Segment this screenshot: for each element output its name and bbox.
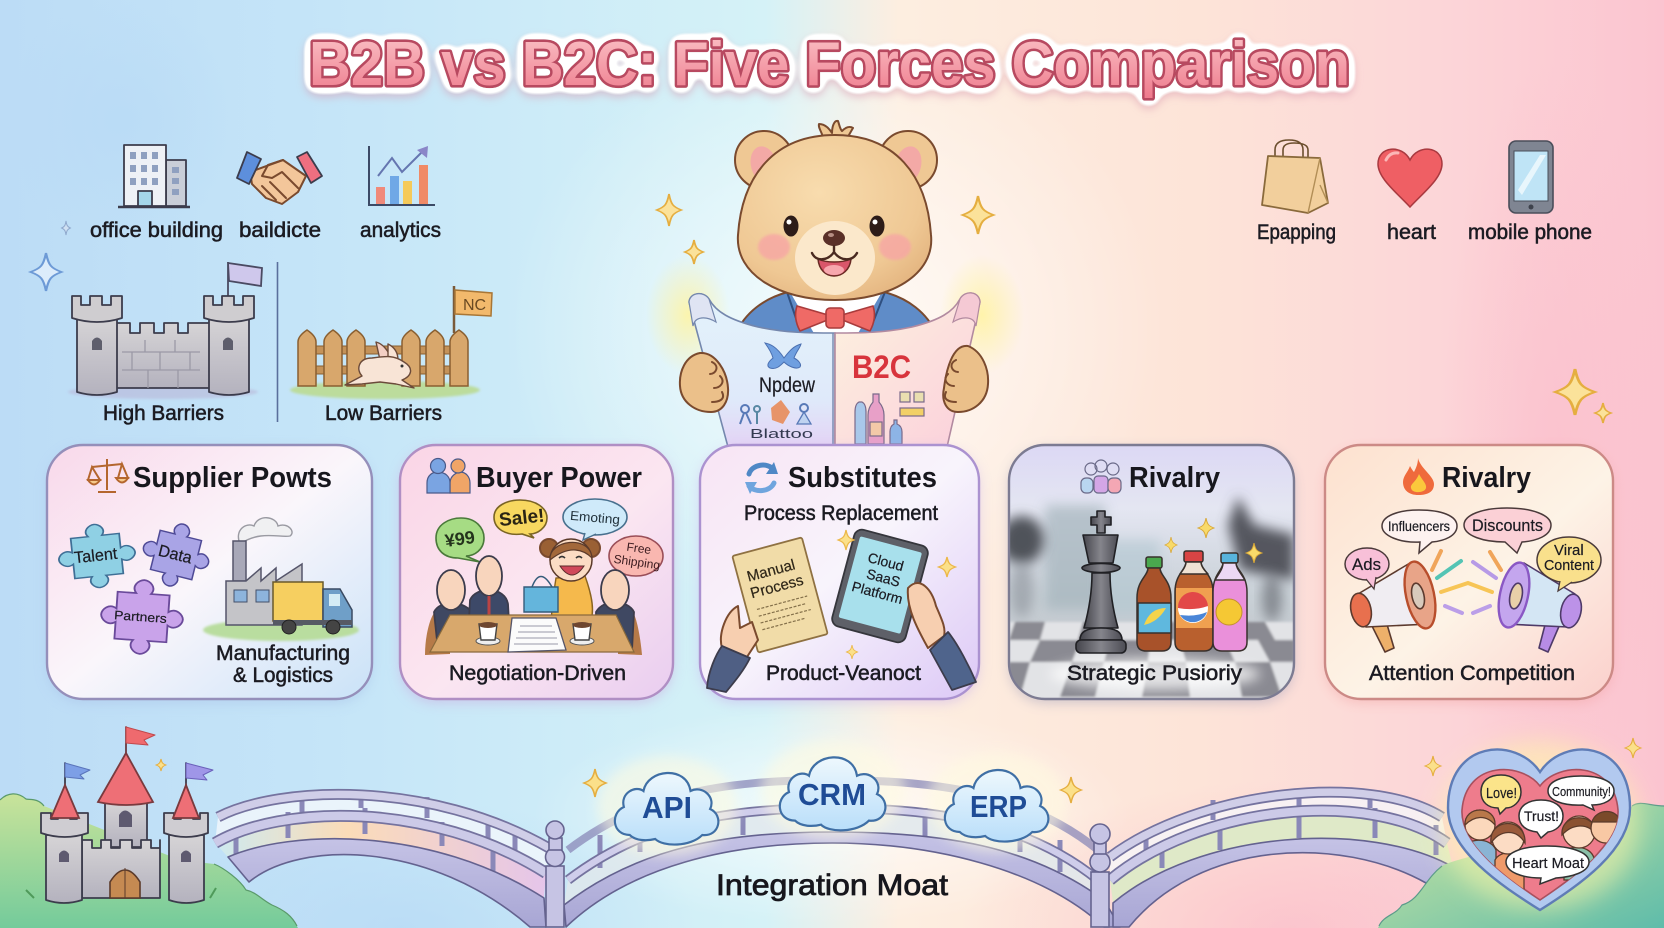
cloud: API: API [642,790,692,825]
puzzle: talent: Talent [73,545,119,567]
icon: mobile phone [1509,141,1553,213]
bear jacket and bow tie [735,292,937,335]
icon: scales [88,459,128,492]
left hand and sleeve [707,606,758,692]
heading: Buyer Power [476,462,642,494]
bubble: emoting [563,499,627,540]
icon: handshake [237,152,322,204]
caption: Manufacturing [216,641,350,665]
label: heart: heart [1387,220,1436,244]
bridge span: left [215,790,549,927]
bubble: ¥99 [436,518,484,562]
meeting table and people [425,556,642,655]
cloud: ERP: ERP [970,789,1027,824]
cloud: ERP [945,770,1048,842]
puzzle: partners: Partners [114,608,168,626]
bridge pillars [546,821,1110,927]
sparkles along the moat [156,738,1641,803]
streaks of attention [1432,551,1501,613]
newspaper small icons [740,400,811,424]
label: handshake: baildicte [239,218,321,242]
right hand and sleeve [908,583,976,690]
blurred city backdrop [1000,496,1294,622]
heart moat [1440,741,1640,910]
label: Integration Moat: Integration Moat [716,869,949,902]
bear paws [680,346,988,412]
bubble: free shipping: Shipping [613,552,661,572]
bubble: Heart Moat [1506,846,1589,884]
icon: low barrier fence and rabbit [290,286,492,399]
bottle: green cap [1137,557,1171,651]
icon: shopping bag [1262,140,1328,213]
icon: bear ears [735,131,937,189]
clouds with system labels [597,740,1067,856]
newspaper bottles [855,392,924,444]
bubble: free shipping: Free [626,540,652,557]
heading: Rivalry [1129,462,1220,494]
chess king [1076,511,1126,653]
puzzle: data: Data [156,542,195,568]
hill: right [1378,803,1664,928]
B2B castle [26,727,216,903]
title: B2B vs B2C: Five Forces Comparison [309,29,1350,98]
bubble: viral content: Viral [1554,542,1584,559]
newspaper heading: B2C: B2C [852,349,911,385]
caption: Attention Competition [1369,661,1575,685]
bottle: blue cap [1213,553,1247,651]
caption [216,641,350,687]
tablet: cloud SaaS platform: SaaS [865,565,902,590]
bubble: Community [1548,776,1614,810]
icon: heart [1378,149,1442,207]
bubble: Trust: Trust! [1524,808,1559,824]
label: analytics: analytics [360,218,441,242]
bubble: Heart Moat: Heart Moat [1512,855,1585,872]
bubble: influencers [1382,510,1457,553]
caption: Strategic Pusioriy [1067,661,1242,685]
label: shopping: Epapping [1257,220,1336,244]
caption: Product-Veanoct [766,661,921,685]
bubble: emoting: Emoting [569,508,621,527]
newspaper logo left [765,343,801,369]
icon: flame [1403,458,1434,495]
tablet: cloud SaaS platform [830,528,930,644]
panel: supplier power [47,445,372,703]
megaphone: left [1348,559,1441,652]
puzzle: data [136,516,216,594]
happy community faces [1462,810,1621,890]
newspaper heading left: Npdew [759,374,816,397]
caption: & Logistics [233,663,333,687]
icon: high barrier castle wall [68,262,262,399]
bubble: ¥99: ¥99 [444,527,476,551]
bubble: influencers: Influencers [1388,518,1450,534]
newspaper small caption: Blattoo [750,426,813,441]
cloud: CRM: CRM [798,777,866,812]
B2C icon row [1257,140,1592,244]
bubble: free shipping [609,536,663,576]
B2B icon row [90,145,441,242]
subheading: Process Replacement [744,501,938,525]
bubble: ads: Ads [1352,555,1381,574]
bubble: discounts: Discounts [1472,516,1543,535]
bridge span: right [1110,790,1453,927]
bubble: discounts [1464,508,1551,553]
cloud: CRM [780,757,885,830]
bubble: Community: Community! [1552,784,1611,799]
bear mascot reading newspaper [646,121,1024,447]
icon: rival group [1081,460,1121,493]
panel: rivalry attention [1325,445,1613,703]
puzzle: talent [56,520,138,592]
bubble: Sale: Sale! [498,506,545,531]
label: High Barriers: High Barriers [103,401,224,425]
sparkles [1165,518,1262,563]
caption: Negotiation-Driven [449,661,626,685]
chessboard floor [1009,622,1294,700]
manual process paper [732,537,828,653]
puzzle: partners [99,577,185,657]
cloud: API [615,773,718,845]
panel: rivalry strategic [1000,445,1294,703]
panel: substitutes [700,445,979,703]
label: office building: office building [90,218,223,242]
bubble: Love: Love! [1486,785,1517,802]
label: Low Barriers: Low Barriers [325,401,442,425]
bridge span: center [564,780,1120,927]
sparkles [838,530,956,659]
sparkle: blue left [30,221,70,291]
heading: Supplier Powts [133,462,332,494]
tablet: cloud SaaS platform: Platform [850,578,905,607]
panel: buyer power [400,445,673,703]
bubble: Sale [494,500,547,538]
icon: people [427,458,470,493]
tablet: cloud SaaS platform: Cloud [866,549,906,574]
heading: Substitutes [788,462,937,494]
icon: analytics chart [369,146,435,205]
manual process paper: Process [749,572,805,602]
hill: left [0,794,298,928]
label: mobile phone: mobile phone [1468,220,1592,244]
bubble: Love [1481,775,1521,814]
icon: swap arrows [745,462,778,494]
bubble: ads [1345,548,1389,589]
newspaper [689,293,980,447]
heading: Rivalry [1442,462,1531,494]
integration bridge [215,780,1453,927]
bubble: viral content: Content [1544,557,1595,574]
bear head [738,121,931,300]
sparkles around bear [657,194,1611,423]
icon: office building [118,145,190,207]
megaphone: right [1493,560,1584,652]
bubble: Trust [1519,800,1563,838]
girl with bag [524,539,600,622]
bottle: red cap [1175,551,1213,651]
icon: factory and truck [203,518,359,641]
icon: low barrier fence and rabbit: NC [463,297,486,314]
manual process paper: Manual [745,556,797,586]
bubble: viral content [1537,537,1601,591]
